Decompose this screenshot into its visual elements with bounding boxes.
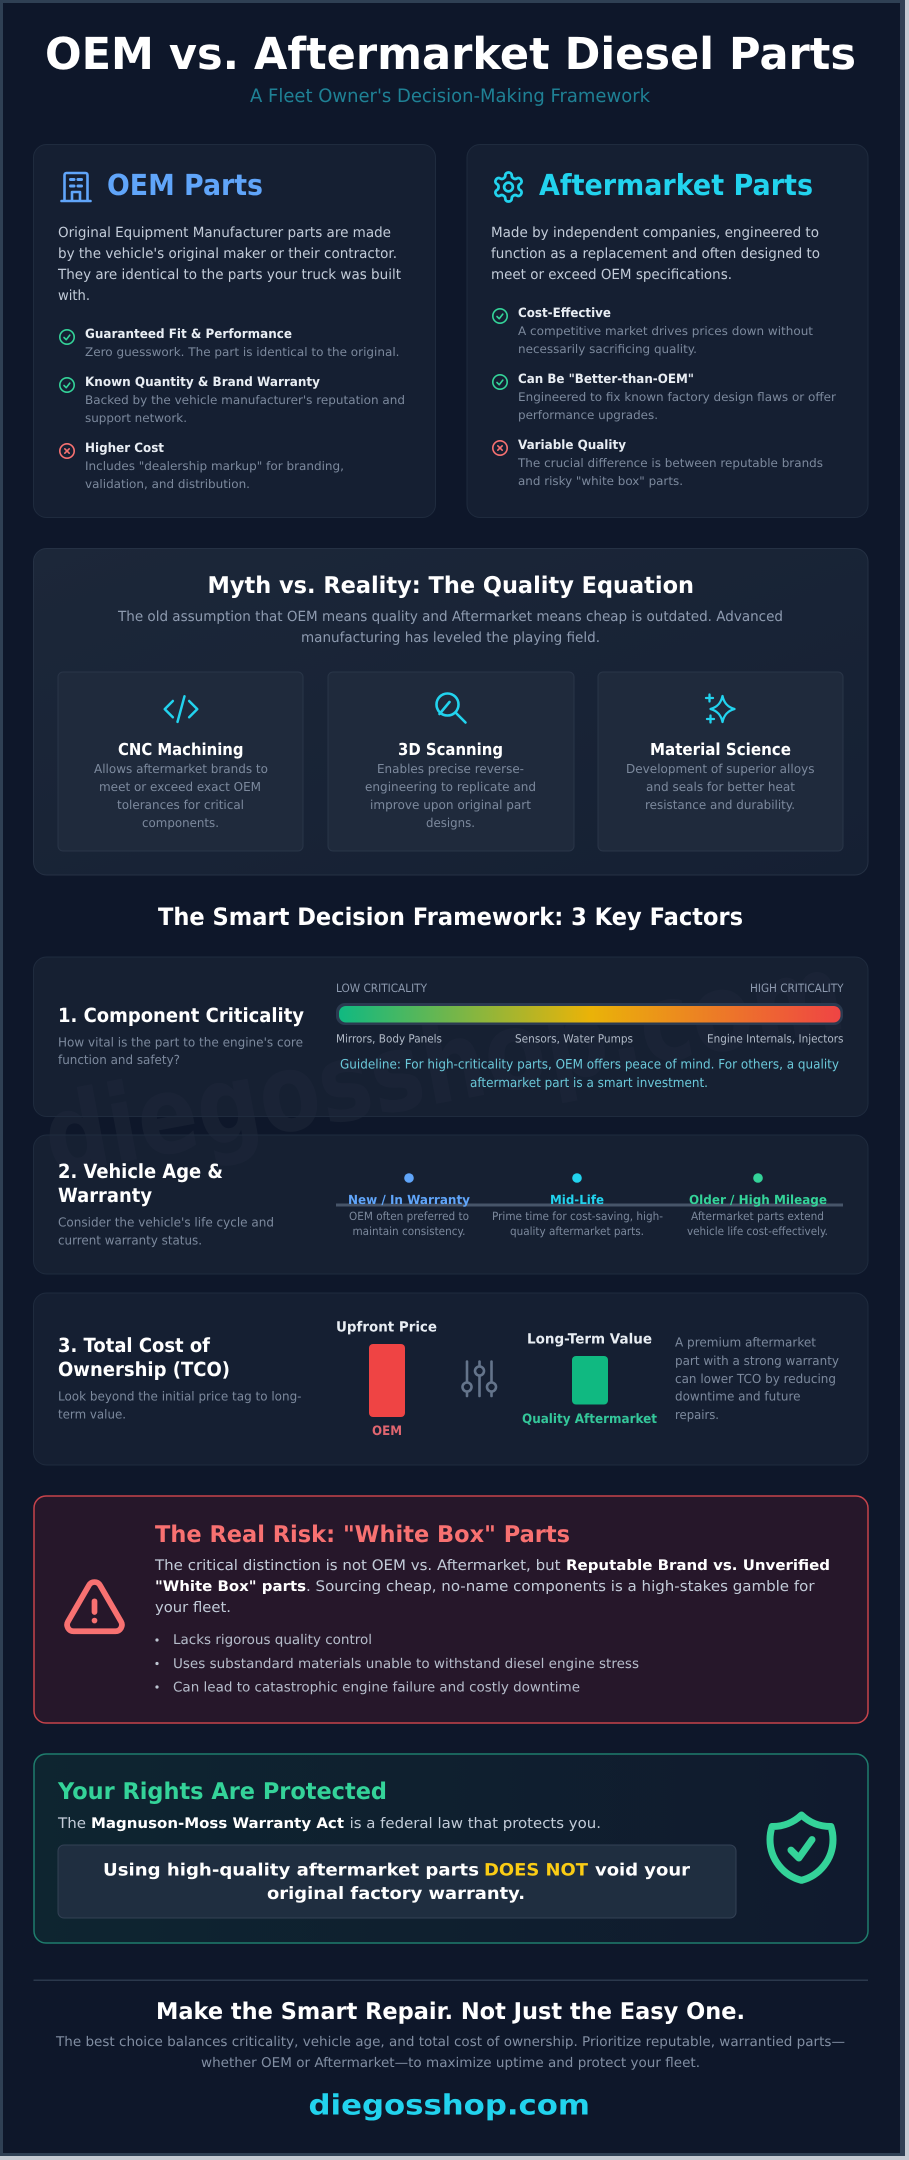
card: material science — [598, 672, 843, 851]
card: 3D scanning — [328, 672, 574, 851]
OEM description: Original Equipment Manufacturer parts are made — [58, 225, 391, 241]
risk paragraph — [154, 1558, 830, 1616]
material science text: Development of superior alloys — [626, 762, 814, 776]
risk bullets: Uses substandard materials unable to withstand diesel engine stress — [173, 1657, 639, 1672]
stage: new — [348, 1173, 470, 1238]
subtitle: A Fleet Owner's Decision-Making Framework — [250, 86, 650, 107]
factor 2 title — [58, 1160, 223, 1207]
CNC text: meet or exceed exact OEM — [99, 780, 261, 794]
factor 3 text — [58, 1389, 302, 1422]
Aftermarket description: function as a replacement and often designed to — [491, 246, 820, 262]
Aftermarket description: Made by independent companies, engineered to — [491, 225, 819, 241]
warranty callout: DOES NOT — [484, 1860, 588, 1880]
item: known quantity: Backed by the vehicle manufacturer's reputation and — [85, 393, 405, 407]
item: cost-effective: A competitive market drives prices down without — [518, 324, 813, 338]
factor 2 title: Warranty — [58, 1184, 152, 1207]
long-term value bar — [522, 1332, 657, 1427]
item: cost-effective: Cost-Effective — [518, 306, 611, 321]
item: cost-effective: necessarily sacrificing quality. — [518, 342, 697, 356]
warranty callout: original factory warranty. — [267, 1884, 525, 1904]
scale part labels: Engine Internals, Injectors — [707, 1032, 844, 1046]
item: guaranteed fit — [60, 327, 400, 359]
TCO explanation: can lower TCO by reducing — [675, 1371, 836, 1386]
rights heading: Your Rights Are Protected — [57, 1779, 387, 1805]
Magnuson-Moss sentence: is a federal law that protects you. — [350, 1816, 601, 1832]
factor 2 text: Consider the vehicle's life cycle and — [58, 1215, 274, 1230]
panel: vehicle age — [34, 1135, 868, 1274]
long-term value bar: Long-Term Value — [527, 1332, 652, 1348]
risk paragraph: The critical distinction is not OEM vs. Aftermarket, but — [154, 1558, 561, 1574]
intro text: The old assumption that OEM means quality and Aftermarket means cheap is outdated. Advanced — [117, 609, 783, 625]
footer heading: Make the Smart Repair. Not Just the Easy One. — [156, 1999, 745, 2025]
heading: Aftermarket Parts: Aftermarket Parts — [539, 168, 813, 202]
OEM description: by the vehicle's original maker or their contractor. — [58, 246, 397, 262]
material science title: Material Science — [650, 740, 791, 759]
scale end labels — [336, 981, 844, 995]
stage: mid-life: Mid-Life — [550, 1192, 604, 1207]
Aftermarket description: meet or exceed OEM specifications. — [491, 267, 732, 283]
Aftermarket description — [491, 225, 820, 283]
upfront price bar — [336, 1320, 437, 1439]
3D scanning text: engineering to replicate and — [365, 780, 536, 794]
item: variable quality: Variable Quality — [518, 438, 627, 453]
material science text: resistance and durability. — [645, 798, 795, 812]
item: known quantity: support network. — [85, 411, 187, 425]
item: guaranteed fit: Guaranteed Fit & Performance — [85, 327, 292, 342]
3D scanning text: designs. — [426, 816, 475, 830]
panel: component criticality — [34, 957, 868, 1116]
item: better than OEM: Engineered to fix known factory design flaws or offer — [518, 390, 836, 404]
factor 2 text: current warranty status. — [58, 1232, 202, 1248]
OEM description — [57, 225, 401, 304]
icon: sliders — [462, 1362, 496, 1396]
CNC text: tolerances for critical — [117, 798, 244, 812]
item: variable quality — [493, 438, 823, 488]
stage: older: Aftermarket parts extend — [691, 1210, 824, 1223]
material science text: and seals for better heat — [646, 780, 795, 794]
Magnuson-Moss sentence — [57, 1816, 601, 1832]
stage: older: vehicle life cost-effectively. — [687, 1225, 828, 1238]
Magnuson-Moss sentence: Magnuson-Moss Warranty Act — [91, 1816, 344, 1832]
icon: building — [62, 173, 90, 201]
panel: warranty rights — [34, 1754, 868, 1943]
footer text: The best choice balances criticality, vehicle age, and total cost of ownership. Prioritize reputable, warrantied parts— — [55, 2035, 845, 2050]
CNC title: CNC Machining — [118, 740, 244, 759]
stage: mid-life: quality aftermarket parts. — [510, 1225, 644, 1238]
timeline axis — [336, 1204, 843, 1206]
stage: new: OEM often preferred to — [349, 1210, 469, 1223]
stage: mid-life: Prime time for cost-saving, high- — [492, 1210, 663, 1223]
3D scanning text: Enables precise reverse- — [377, 762, 524, 776]
scale end labels: LOW CRITICALITY — [336, 981, 428, 995]
icon: code brackets — [165, 696, 197, 722]
heading: OEM Parts: OEM Parts — [107, 168, 263, 202]
3D scanning title: 3D Scanning — [398, 740, 503, 759]
factor 3 title: 3. Total Cost of — [58, 1334, 210, 1357]
card: CNC machining — [58, 672, 303, 851]
icon: shield check — [770, 1815, 833, 1880]
TCO explanation: repairs. — [675, 1407, 719, 1422]
risk paragraph: Reputable Brand vs. Unverified — [566, 1558, 830, 1574]
scale end labels: HIGH CRITICALITY — [750, 981, 844, 995]
stage: mid-life — [492, 1173, 663, 1238]
warranty callout: Using high-quality aftermarket parts — [103, 1860, 479, 1880]
footer text: whether OEM or Aftermarket—to maximize uptime and protect your fleet. — [201, 2056, 700, 2071]
risk heading: The Real Risk: "White Box" Parts — [155, 1522, 570, 1548]
risk paragraph: your fleet. — [155, 1600, 231, 1616]
icon: gear — [495, 172, 522, 202]
item: higher cost: Includes "dealership markup" for branding, — [85, 459, 344, 473]
risk bullets: Can lead to catastrophic engine failure and costly downtime — [173, 1681, 580, 1696]
heading: decision framework: The Smart Decision Framework: 3 Key Factors — [158, 903, 743, 931]
criticality gradient bar — [336, 1003, 843, 1025]
upfront price bar: OEM — [372, 1424, 402, 1439]
guideline: Guideline: For high-criticality parts, OEM offers peace of mind. For others, a quality — [340, 1058, 839, 1072]
factor 1 text: How vital is the part to the engine's core — [58, 1034, 303, 1050]
guideline — [340, 1058, 839, 1091]
panel: Aftermarket parts — [467, 144, 868, 518]
factor 1 text: function and safety? — [58, 1052, 180, 1067]
item: higher cost — [60, 441, 344, 491]
factor 3 title — [58, 1334, 230, 1381]
item: higher cost: validation, and distribution. — [85, 477, 250, 491]
title: OEM vs. Aftermarket Diesel Parts — [45, 29, 856, 80]
TCO explanation: downtime and future — [675, 1389, 801, 1404]
item: variable quality: The crucial difference is between reputable brands — [517, 456, 823, 470]
icon: warning triangle — [67, 1582, 122, 1631]
item: variable quality: and risky "white box" parts. — [518, 474, 683, 488]
OEM description: They are identical to the parts your truck was built — [57, 267, 401, 283]
CNC text: components. — [142, 816, 219, 830]
TCO explanation: part with a strong warranty — [675, 1353, 840, 1368]
item: guaranteed fit: Zero guesswork. The part is identical to the original. — [85, 345, 400, 359]
intro text: manufacturing has leveled the playing field. — [301, 630, 600, 646]
factor 3 text: term value. — [58, 1406, 126, 1422]
panel: total cost of ownership — [34, 1293, 868, 1465]
OEM description: with. — [58, 288, 90, 304]
website: diegosshop.com — [308, 2088, 590, 2122]
stage: new: maintain consistency. — [352, 1225, 466, 1238]
item: better than OEM: performance upgrades. — [518, 408, 658, 422]
scale part labels — [336, 1032, 844, 1046]
factor 2 text — [58, 1215, 274, 1248]
icon: magnifier — [436, 694, 466, 722]
3D scanning text: improve upon original part — [370, 798, 531, 812]
scale part labels: Mirrors, Body Panels — [336, 1032, 442, 1046]
scale part labels: Sensors, Water Pumps — [515, 1032, 633, 1046]
stage: new: New / In Warranty — [348, 1192, 470, 1207]
TCO explanation — [675, 1335, 840, 1422]
stage: older — [687, 1173, 828, 1238]
stage: older: Older / High Mileage — [689, 1192, 827, 1207]
item: known quantity: Known Quantity & Brand Warranty — [85, 375, 321, 390]
item: higher cost: Higher Cost — [85, 441, 164, 456]
footer text — [55, 2035, 845, 2071]
intro text — [117, 609, 783, 646]
long-term value bar: Quality Aftermarket — [522, 1412, 657, 1427]
panel: white box risk — [34, 1496, 868, 1723]
upfront price bar: Upfront Price — [336, 1320, 437, 1336]
item: better than OEM — [493, 372, 836, 422]
icon: sparkles — [706, 694, 734, 722]
item: cost-effective — [493, 306, 813, 356]
factor 1 text — [58, 1034, 303, 1067]
TCO explanation: A premium aftermarket — [675, 1335, 816, 1350]
factor 3 text: Look beyond the initial price tag to long- — [58, 1389, 302, 1404]
panel: myth vs reality — [34, 548, 868, 875]
risk bullets: Lacks rigorous quality control — [173, 1633, 372, 1648]
heading: myth vs reality: Myth vs. Reality: The Quality Equation — [208, 573, 694, 599]
warranty callout — [58, 1845, 736, 1918]
panel: OEM parts — [34, 144, 436, 518]
risk paragraph: . Sourcing cheap, no-name components is a high-stakes gamble for — [306, 1579, 815, 1595]
3D scanning text — [365, 762, 536, 830]
item: better than OEM: Can Be "Better-than-OEM" — [518, 372, 694, 387]
material science text — [626, 762, 814, 812]
guideline: aftermarket part is a smart investment. — [470, 1076, 708, 1091]
warranty callout: void your — [595, 1860, 691, 1880]
CNC text: Allows aftermarket brands to — [94, 762, 268, 776]
risk paragraph: "White Box" parts — [155, 1579, 306, 1595]
Magnuson-Moss sentence: The — [57, 1816, 86, 1832]
factor 1 title: 1. Component Criticality — [58, 1004, 304, 1027]
risk bullets — [155, 1633, 639, 1696]
item: known quantity — [60, 375, 405, 425]
factor 2 title: 2. Vehicle Age & — [58, 1160, 223, 1183]
CNC text — [94, 762, 268, 830]
factor 3 title: Ownership (TCO) — [58, 1358, 230, 1381]
